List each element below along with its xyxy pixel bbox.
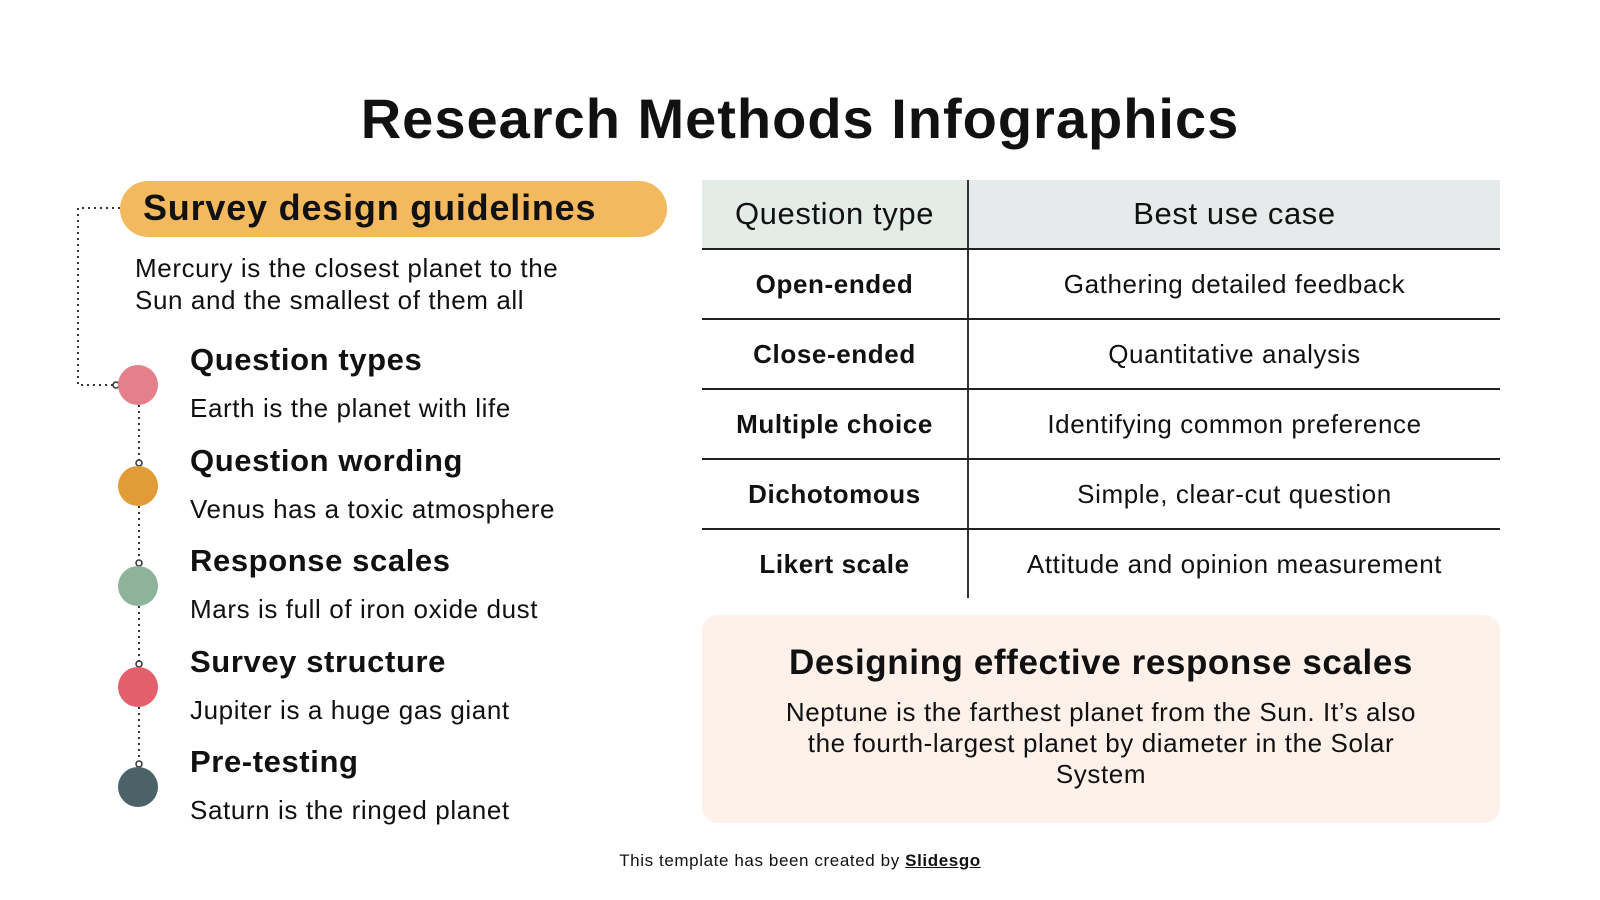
item: question wording: Venus has a toxic atmosphere	[190, 494, 555, 524]
table: question types: Gathering detailed feedback	[1064, 268, 1405, 298]
text: Survey structure	[190, 644, 446, 679]
connector dotted lines	[77, 207, 143, 768]
footer: This template has been created by Slidesgo	[619, 851, 981, 870]
table: question types: Identifying common preference	[1047, 408, 1422, 438]
intro text	[135, 253, 558, 315]
table: question types: Attitude and opinion measurement	[1027, 548, 1442, 578]
item: survey structure: Jupiter is a huge gas giant	[190, 695, 510, 725]
item: response scales	[118, 543, 538, 624]
item: question types: Earth is the planet with life	[190, 393, 511, 423]
title: Research Methods Infographics	[361, 87, 1239, 150]
heading pill: survey design guidelines: Survey design guidelines	[143, 187, 596, 228]
text: Response scales	[190, 543, 451, 578]
table: question types: Open-ended	[756, 268, 913, 298]
table: question types: Simple, clear-cut question	[1077, 478, 1392, 508]
item: pre-testing	[118, 744, 510, 825]
table: question types: Best use case	[1133, 196, 1336, 231]
text: Pre-testing	[190, 744, 359, 779]
text: Question wording	[190, 443, 463, 478]
intro text: Sun and the smallest of them all	[135, 285, 524, 315]
callout box: response scales: Designing effective response scales	[789, 643, 1413, 682]
table: question types: Close-ended	[753, 338, 916, 368]
table: question types: Question type	[735, 196, 934, 231]
item: question types	[118, 342, 511, 423]
table: question types: Likert scale	[759, 548, 910, 578]
callout box: response scales: Neptune is the farthest planet from the Sun. It’s also the fourth-largest planet by diameter in the Solar System	[786, 697, 1416, 789]
table: question types: Quantitative analysis	[1108, 338, 1361, 368]
table: question types	[702, 180, 1500, 598]
callout box: response scales	[702, 615, 1500, 823]
intro text: Mercury is the closest planet to the	[135, 253, 558, 283]
item: response scales: Mars is full of iron oxide dust	[190, 594, 538, 624]
item: question wording	[118, 443, 555, 524]
text: Question types	[190, 342, 422, 377]
table: question types: Dichotomous	[748, 478, 921, 508]
item: pre-testing: Saturn is the ringed planet	[190, 795, 510, 825]
item: survey structure	[118, 644, 510, 725]
table: question types: Multiple choice	[736, 408, 933, 438]
heading pill: survey design guidelines	[120, 181, 667, 237]
